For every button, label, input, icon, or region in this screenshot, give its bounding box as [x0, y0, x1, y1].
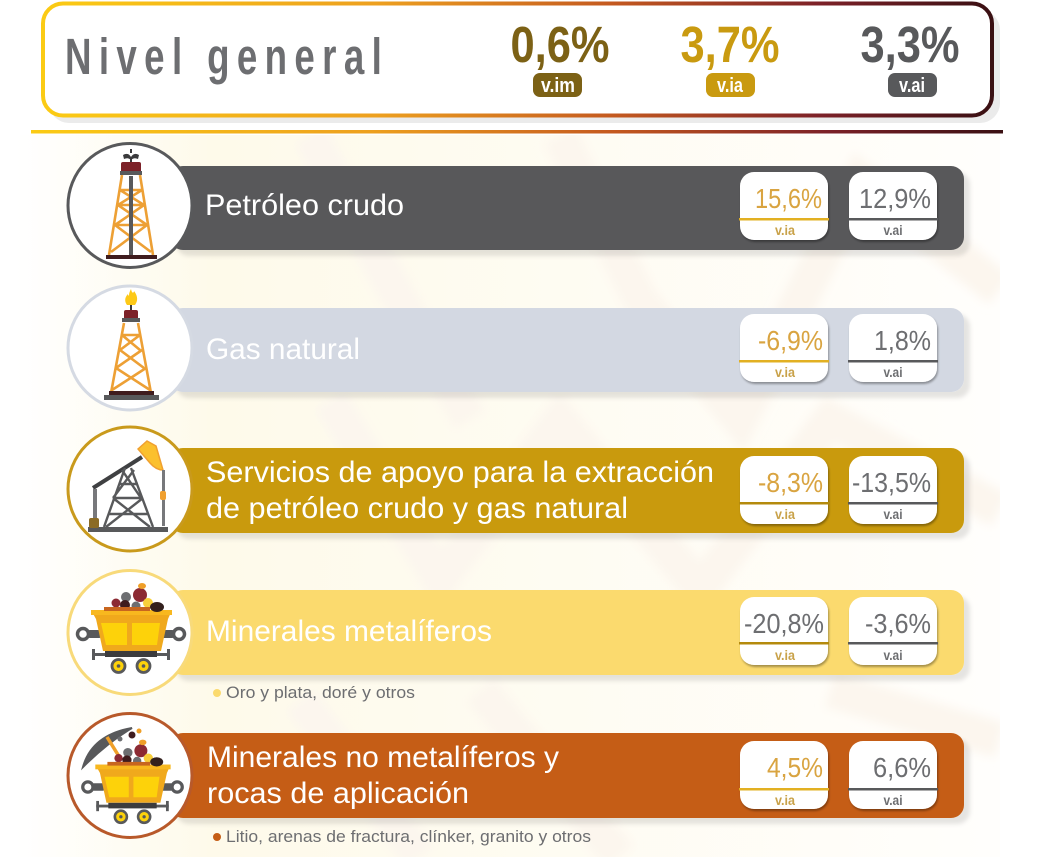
chip: v.ai: 1,8%: [874, 325, 931, 356]
row: Gas natural: [68, 286, 964, 410]
bar: [170, 733, 964, 818]
bar: [170, 308, 964, 392]
chip: v.ai: v.ai: [884, 364, 902, 380]
chip: v.ai: -13,5%: [852, 467, 931, 498]
label: [206, 456, 714, 525]
stat: v.ai: v.ai: [899, 75, 925, 97]
label: rocas de aplicación: [207, 777, 469, 810]
chip: v.ai: v.ai: [884, 222, 902, 238]
chip: v.ia: v.ia: [775, 647, 795, 663]
bar: [170, 590, 964, 675]
chip: v.ia: 4,5%: [767, 752, 823, 783]
label: Minerales no metalíferos y: [207, 741, 559, 774]
chip: v.ai: [848, 741, 938, 809]
label: Minerales metalíferos: [206, 615, 492, 648]
chip: v.ai: 6,6%: [873, 752, 931, 783]
background: [92, 135, 1000, 857]
chip: v.ai: 12,9%: [859, 183, 931, 214]
heading: Nivel general: [65, 29, 382, 85]
note: Litio, arenas de fractura, clínker, granito y otros: [226, 827, 591, 846]
chip: v.ia: [739, 597, 829, 665]
chip: v.ai: v.ai: [884, 647, 902, 663]
chip: v.ai: -3,6%: [865, 608, 931, 639]
chip: v.ai: [848, 314, 938, 382]
chip: v.ia: [739, 456, 829, 524]
icon: mine cart: [68, 570, 192, 694]
row: Minerales no metalíferos: [68, 714, 964, 846]
label: Servicios de apoyo para la extracción: [206, 456, 714, 489]
label: [207, 741, 559, 810]
bar: [170, 166, 964, 250]
stat: v.ai: [860, 16, 960, 97]
chip: v.ia: 15,6%: [755, 183, 822, 214]
stat: v.im: 0,6%: [510, 16, 610, 73]
row: Petróleo crudo: [68, 144, 964, 268]
chip: v.ia: [739, 741, 829, 809]
label: Gas natural: [206, 333, 360, 366]
label: de petróleo crudo y gas natural: [206, 492, 628, 525]
chip: v.ai: v.ai: [884, 792, 902, 808]
chip: v.ai: [848, 456, 938, 524]
chip: v.ia: [739, 314, 829, 382]
chip: v.ia: v.ia: [775, 222, 795, 238]
bar: [170, 448, 964, 533]
chip: v.ia: v.ia: [775, 364, 795, 380]
chip: v.ia: -20,8%: [744, 608, 824, 639]
note: Oro y plata, doré y otros: [226, 683, 415, 702]
chip: v.ai: [848, 597, 938, 665]
icon: pumpjack: [68, 427, 192, 551]
label: Petróleo crudo: [205, 189, 404, 222]
chip: v.ia: -6,9%: [758, 325, 823, 356]
row: Servicios de apoyo: [68, 427, 964, 551]
stat: v.im: [510, 16, 610, 97]
chip: v.ia: -8,3%: [758, 467, 823, 498]
header panel: nivel general: [43, 4, 1000, 123]
chip: v.ai: [848, 172, 938, 240]
icon: oil derrick: [68, 144, 192, 268]
chip: v.ia: v.ia: [775, 792, 795, 808]
stat: v.im: v.im: [541, 75, 575, 97]
icon: mine cart with pickaxe: [68, 714, 192, 838]
chip: v.ia: v.ia: [775, 506, 795, 522]
stat: v.ia: [680, 16, 780, 97]
chip: v.ai: v.ai: [884, 506, 902, 522]
stat: v.ia: v.ia: [717, 75, 744, 97]
chip: v.ia: [739, 172, 829, 240]
icon: gas derrick with flame: [68, 286, 192, 410]
stat: v.ai: 3,3%: [860, 16, 960, 73]
stat: v.ia: 3,7%: [680, 16, 780, 73]
row: Minerales metalíferos: [68, 570, 964, 702]
